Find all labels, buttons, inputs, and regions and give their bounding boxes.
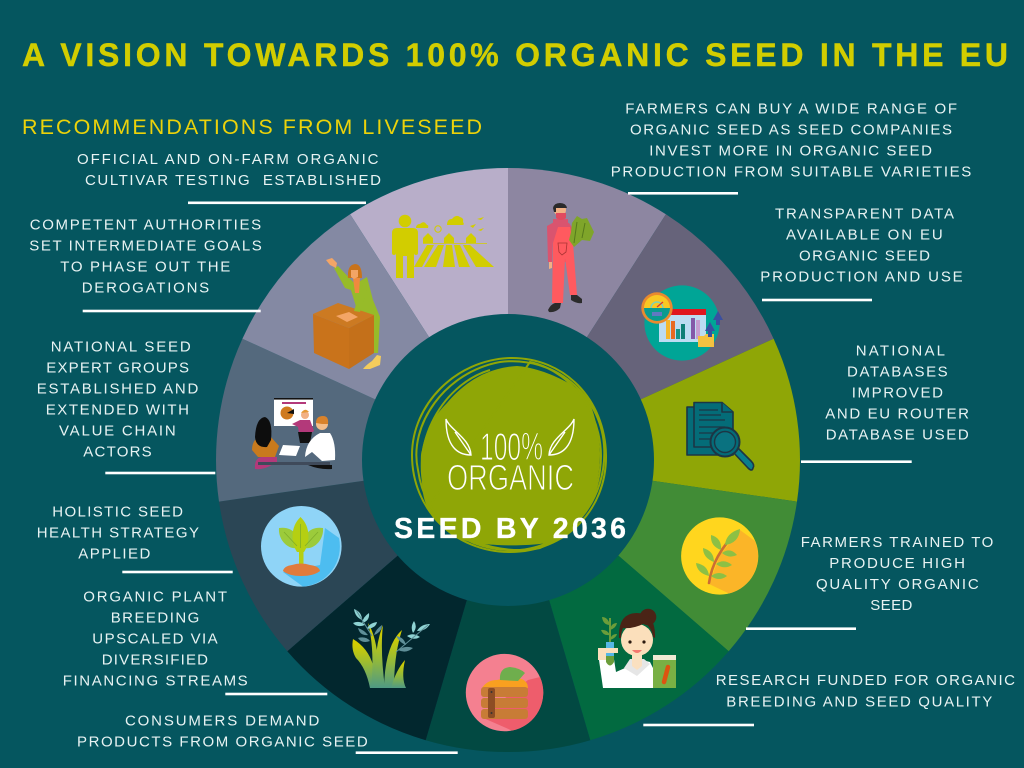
- callout: consumers demand: [77, 712, 458, 754]
- callout: national seed expert groups: [37, 338, 215, 474]
- callout: transparent data: ORGANIC SEED: [799, 248, 930, 265]
- callout: national seed expert groups: EXPERT GROUPS: [46, 359, 189, 376]
- callout: transparent data: [760, 206, 963, 301]
- callout: national seed expert groups: VALUE CHAIN: [59, 422, 176, 439]
- callout: organic plant breeding: BREEDING: [111, 609, 199, 626]
- callout: research funded: RESEARCH FUNDED FOR ORGANIC: [716, 672, 1015, 689]
- callout: official and on-farm testing: OFFICIAL AND ON-FARM ORGANIC: [77, 151, 379, 168]
- icon: branch on yellow circle: [681, 517, 758, 595]
- callout: national databases: NATIONAL: [856, 342, 945, 359]
- callout: national seed expert groups: ACTORS: [83, 443, 152, 460]
- callout: national seed expert groups: NATIONAL SEED: [51, 338, 191, 355]
- callout: consumers demand: PRODUCTS FROM ORGANIC SEED: [77, 733, 368, 750]
- callout: competent authorities: DEROGATIONS: [82, 280, 209, 297]
- centre badge: 100% organic seed by 2036: [394, 358, 626, 552]
- callout: farmers trained: QUALITY ORGANIC: [816, 576, 979, 593]
- icon: scientist with plant and book: [598, 609, 676, 688]
- title: A VISION TOWARDS 100% ORGANIC SEED IN THE EU: [22, 37, 1008, 73]
- callout: transparent data: PRODUCTION AND USE: [760, 269, 963, 286]
- icon: crate of vegetables on pink circle: [466, 654, 543, 731]
- callout: farmers can buy organic seed: INVEST MORE IN ORGANIC SEED: [649, 143, 932, 160]
- callout: consumers demand: CONSUMERS DEMAND: [125, 712, 319, 729]
- callout: holistic seed health: APPLIED: [78, 545, 150, 562]
- centre badge: 100% organic seed by 2036: 100%: [480, 426, 543, 469]
- icon: document and magnifier: [687, 402, 754, 470]
- callout: national databases: IMPROVED: [852, 384, 943, 401]
- centre badge: 100% organic seed by 2036: SEED BY 2036: [394, 513, 626, 545]
- icon: woman at ballot box: [313, 258, 381, 369]
- callout: competent authorities: [29, 216, 262, 312]
- callout: farmers trained: PRODUCE HIGH: [829, 555, 965, 572]
- callout: transparent data: AVAILABLE ON EU: [786, 227, 943, 244]
- callout: farmers can buy organic seed: FARMERS CAN BUY A WIDE RANGE OF: [625, 101, 957, 118]
- callout: national seed expert groups: ESTABLISHED AND: [37, 380, 198, 397]
- callout: organic plant breeding: DIVERSIFIED: [102, 651, 208, 668]
- callout: organic plant breeding: ORGANIC PLANT: [83, 588, 227, 605]
- callout: official and on-farm testing: CULTIVAR TESTING ESTABLISHED: [85, 172, 381, 189]
- callout: farmers trained: FARMERS TRAINED TO: [801, 534, 993, 551]
- callout: national seed expert groups: EXTENDED WITH: [46, 401, 189, 418]
- callout: national databases: DATABASE USED: [826, 426, 969, 443]
- callout: farmers can buy organic seed: [611, 101, 971, 195]
- callout: holistic seed health: HEALTH STRATEGY: [37, 524, 199, 541]
- callout: farmers trained: SEED: [870, 597, 912, 614]
- icon: seedling on blue circle: [261, 506, 342, 587]
- callout: competent authorities: TO PHASE OUT THE: [60, 259, 230, 276]
- centre badge: 100% organic seed by 2036: ORGANIC: [447, 457, 574, 498]
- callout: competent authorities: COMPETENT AUTHORITIES: [30, 216, 261, 233]
- wheel of eleven wedges: [216, 168, 800, 752]
- callout: competent authorities: SET INTERMEDIATE GOALS: [29, 238, 262, 255]
- icon: grass and leaves: [352, 609, 430, 688]
- callout: farmers can buy organic seed: ORGANIC SEED AS SEED COMPANIES: [630, 122, 952, 139]
- callout: official and on-farm testing: [77, 151, 381, 204]
- callout: farmers can buy organic seed: PRODUCTION FROM SUITABLE VARIETIES: [611, 164, 971, 181]
- callout: national databases: [801, 342, 969, 463]
- icon: farmer with greens: [547, 203, 594, 312]
- callout: holistic seed health: HOLISTIC SEED: [52, 503, 183, 520]
- callout: national databases: AND EU ROUTER: [825, 405, 969, 422]
- callout: farmers trained: [746, 534, 993, 630]
- icon: meeting around presentation: [252, 398, 335, 469]
- callout: holistic seed health: [37, 503, 233, 573]
- callout: organic plant breeding: FINANCING STREAMS: [63, 672, 248, 689]
- subtitle: RECOMMENDATIONS FROM LIVESEED: [22, 115, 482, 139]
- callout: organic plant breeding: [63, 588, 327, 695]
- icon: data chart with gauge: [641, 285, 723, 361]
- icon: person and fields: [392, 215, 494, 278]
- callout: research funded: [643, 672, 1015, 726]
- callout: national databases: DATABASES: [847, 363, 948, 380]
- callout: organic plant breeding: UPSCALED VIA: [92, 630, 218, 647]
- callout: research funded: BREEDING AND SEED QUALITY: [726, 693, 992, 710]
- callout: transparent data: TRANSPARENT DATA: [775, 206, 954, 223]
